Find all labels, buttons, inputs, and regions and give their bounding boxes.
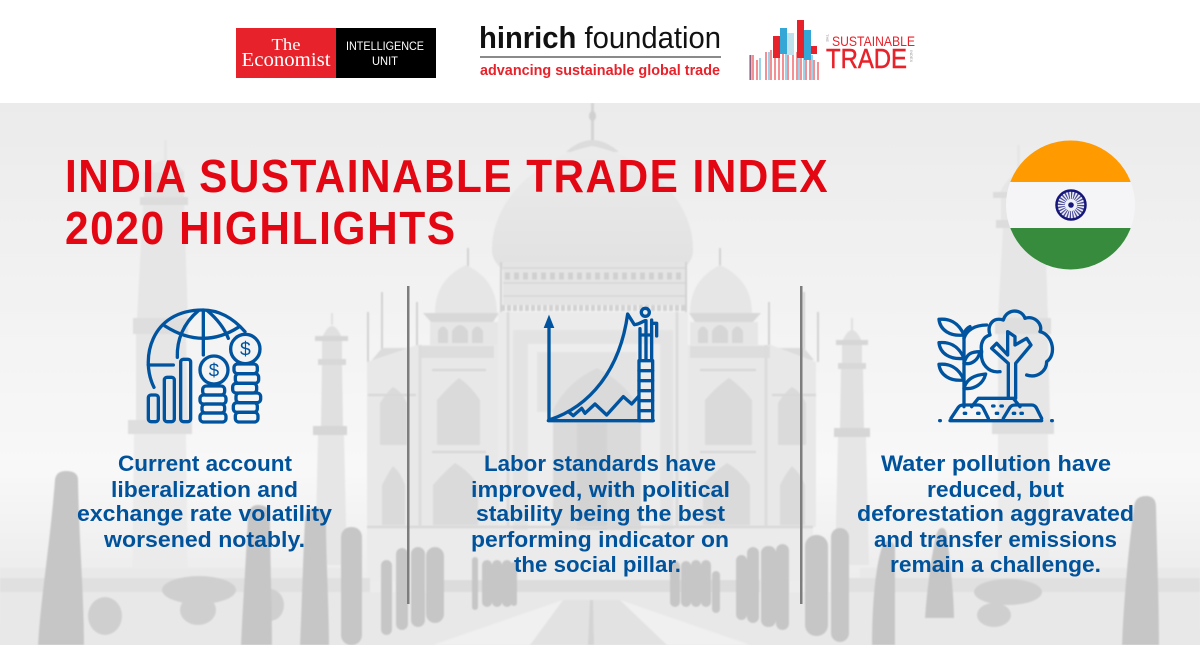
- large right minaret: [992, 145, 1054, 590]
- logo: The Economist Intelligence Unit: The: [272, 35, 300, 54]
- small right minaret: [834, 318, 870, 565]
- large left minaret: [128, 140, 192, 590]
- logo: The Economist Intelligence Unit: INTELLIGENCE: [346, 41, 424, 53]
- text block: current account: worsened notably.: [103, 527, 305, 552]
- central dome and finial: [591, 103, 594, 143]
- text block: labor standards: performing indicator on: [471, 527, 729, 552]
- text block: environment: and transfer emissions: [874, 527, 1117, 552]
- small left minaret: [313, 313, 348, 565]
- text block: labor standards: stability being the best: [476, 501, 726, 526]
- icon: rising chart with figure on ladder: [544, 308, 657, 421]
- text block: environment: [857, 451, 1134, 577]
- text block: environment: Water pollution have: [881, 451, 1111, 476]
- icon: plant and tree on mounds: [939, 311, 1052, 421]
- logo: Hinrich Foundation: [479, 20, 721, 79]
- logo: Hinrich Foundation: advancing sustainable global trade: [480, 63, 720, 79]
- title: INDIA SUSTAINABLE TRADE INDEX: [65, 151, 828, 202]
- small domes with chhatris: [430, 265, 758, 348]
- logo: The Economist Intelligence Unit: [236, 28, 436, 78]
- text block: current account: exchange rate volatility: [77, 501, 333, 526]
- spires: [367, 248, 819, 362]
- text block: labor standards: the social pillar.: [514, 552, 681, 577]
- title: 2020 HIGHLIGHTS: [65, 203, 455, 254]
- panel: current account: [77, 310, 333, 552]
- title: [65, 151, 828, 254]
- divider: left: [407, 286, 410, 604]
- logo: The Sustainable Trade Index: [750, 20, 915, 80]
- logo: The Economist Intelligence Unit: Economist: [242, 50, 331, 71]
- logo: The Sustainable Trade Index: INDEX: [909, 50, 914, 63]
- logo: The Sustainable Trade Index: THE: [825, 34, 830, 42]
- logo: The Economist Intelligence Unit: UNIT: [372, 56, 398, 68]
- icon: India flag: [1006, 140, 1134, 270]
- panel: environment: [857, 311, 1134, 577]
- icon: globe with bars and coins: $: [240, 340, 251, 361]
- building arches: [380, 368, 806, 530]
- bushes: [88, 576, 1042, 635]
- text block: current account: Current account: [118, 451, 293, 476]
- icon: globe with bars and coins: $: [209, 359, 220, 380]
- text block: environment: deforestation aggravated: [857, 501, 1134, 526]
- terrace, horizon and ground: [0, 578, 1200, 592]
- text block: labor standards: improved, with political: [471, 477, 730, 502]
- logo: The Sustainable Trade Index: SUSTAINABLE: [832, 34, 915, 49]
- text block: labor standards: Labor standards have: [484, 451, 716, 476]
- text block: current account: liberalization and: [111, 477, 298, 502]
- panel: labor standards: [471, 308, 730, 577]
- header band: [0, 0, 1200, 103]
- text block: environment: remain a challenge.: [890, 552, 1101, 577]
- main building: [367, 345, 816, 527]
- logo: The Sustainable Trade Index: TRADE: [826, 43, 907, 74]
- text block: labor standards: [471, 451, 730, 577]
- cypress trees: [38, 471, 1159, 645]
- divider: right: [800, 286, 802, 604]
- logo: Hinrich Foundation: hinrich foundation: [479, 20, 721, 55]
- icon: globe with bars and coins: [148, 310, 261, 422]
- text block: environment: reduced, but: [927, 477, 1065, 502]
- text block: current account: [77, 451, 333, 552]
